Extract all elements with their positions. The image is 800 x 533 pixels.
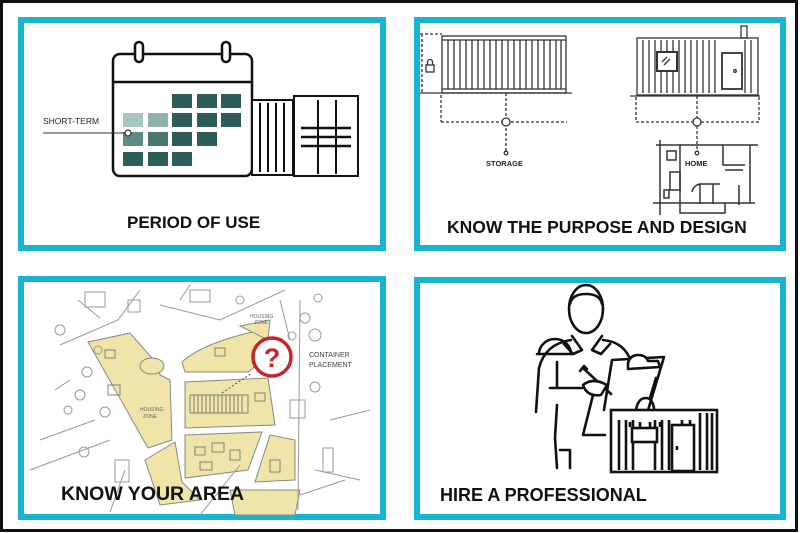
callout: container placement: CONTAINER bbox=[309, 352, 350, 359]
map labels: HOUSING bbox=[140, 407, 163, 413]
icon: home container elevation bbox=[630, 26, 760, 155]
heading: know the purpose and design: KNOW THE PURPOSE AND DESIGN bbox=[447, 217, 747, 237]
map labels: ZONE bbox=[254, 320, 269, 326]
callout: container placement: ? bbox=[264, 343, 280, 373]
heading: period of use: PERIOD OF USE bbox=[127, 213, 260, 232]
icon: storage container elevation bbox=[420, 34, 572, 155]
panel: know your area bbox=[21, 279, 383, 517]
panel: know the purpose and design bbox=[417, 20, 783, 248]
map labels: ZONE bbox=[143, 414, 158, 420]
icon: professional with clipboard and container bbox=[536, 285, 664, 468]
heading: know your area: KNOW YOUR AREA bbox=[61, 483, 244, 505]
icon: shipping container bbox=[252, 96, 358, 176]
callout: short-term bbox=[43, 116, 131, 136]
map labels bbox=[140, 314, 273, 420]
panel: period of use bbox=[21, 20, 383, 248]
callout: short-term: SHORT-TERM bbox=[43, 116, 99, 126]
icon: calendar bbox=[113, 42, 252, 176]
callout: container placement: PLACEMENT bbox=[309, 362, 353, 369]
heading: hire a professional: HIRE A PROFESSIONAL bbox=[440, 485, 647, 505]
panel: hire a professional bbox=[417, 280, 783, 517]
map labels: HOUSING bbox=[250, 314, 273, 320]
icon: floor plan bbox=[653, 140, 758, 215]
label: storage: STORAGE bbox=[486, 159, 523, 168]
callout: container placement bbox=[253, 338, 353, 376]
map bbox=[88, 320, 300, 515]
label: home: HOME bbox=[685, 159, 708, 168]
